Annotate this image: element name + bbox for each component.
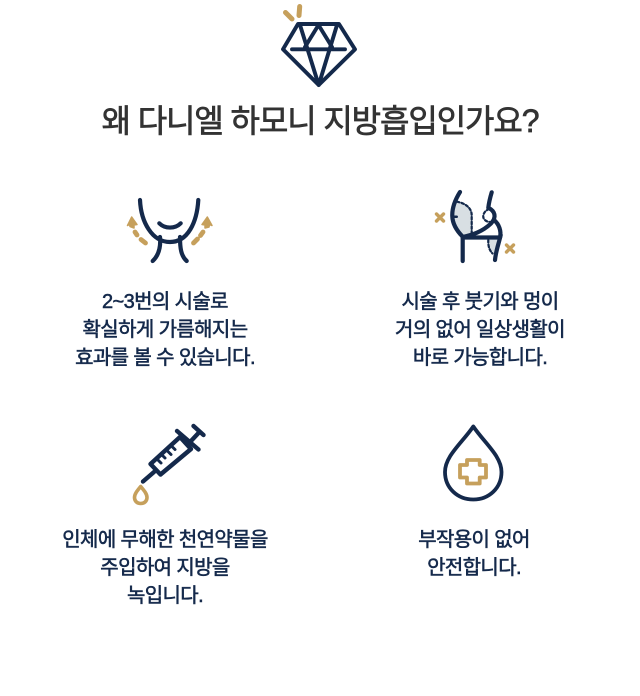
icon: diamond (281, 4, 357, 88)
text: recovery (395, 291, 565, 369)
text: recovery: 바로 가능합니다. (413, 347, 547, 369)
text: effect: 확실하게 가름해지는 (83, 319, 247, 341)
text: effect: 2~3번의 시술로 (102, 291, 228, 313)
text: injection: 인체에 무해한 천연약물을 (62, 529, 268, 551)
title: 왜 다니엘 하모니 지방흡입인가요? (102, 103, 538, 139)
text: safety (418, 529, 530, 579)
text: effect (75, 291, 255, 369)
text: safety: 안전합니다. (427, 557, 521, 579)
text: injection (62, 528, 268, 607)
text: effect: 효과를 볼 수 있습니다. (75, 347, 255, 369)
text: recovery: 시술 후 붓기와 멍이 (401, 291, 559, 313)
text: injection: 주입하여 지방을 (100, 557, 230, 579)
text: safety: 부작용이 없어 (418, 529, 530, 551)
text: injection: 녹입니다. (127, 585, 203, 607)
text: recovery: 거의 없어 일상생활이 (395, 319, 565, 341)
